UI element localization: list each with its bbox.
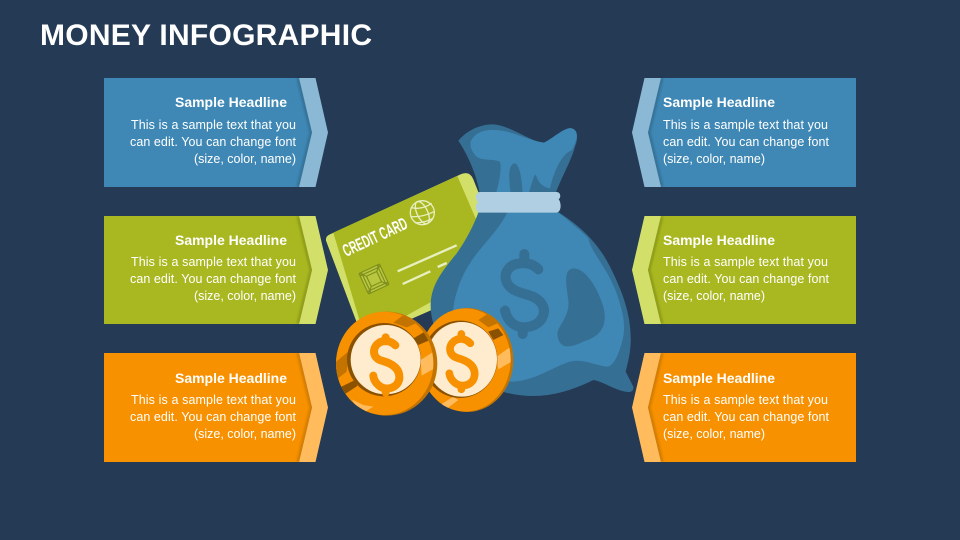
icon: dollar sign on right coin	[449, 334, 475, 389]
body text: top left: (size, color, name)	[194, 152, 296, 166]
chevron: top left	[299, 78, 328, 187]
headline: top right: Sample Headline	[663, 94, 775, 110]
body text: bottom right	[663, 393, 830, 441]
icon: globe	[410, 200, 434, 226]
chevron: bottom right	[632, 353, 661, 462]
body text: top left: This is a sample text that you	[131, 118, 296, 132]
body text: middle right: (size, color, name)	[663, 289, 765, 303]
body text: bottom right: can edit. You can change font	[663, 410, 830, 424]
body text: bottom left: (size, color, name)	[194, 427, 296, 441]
icon: chip	[359, 264, 389, 294]
body text: top right: (size, color, name)	[663, 152, 765, 166]
body text: middle left: This is a sample text that you	[131, 255, 296, 269]
icon: left coin	[333, 310, 437, 416]
body text: bottom left: This is a sample text that you	[131, 393, 296, 407]
chevron: bottom left	[299, 353, 328, 462]
body text: bottom right: This is a sample text that you	[663, 393, 828, 407]
panel: bottom right	[632, 353, 856, 462]
panel: middle left	[104, 216, 328, 324]
body text: bottom right: (size, color, name)	[663, 427, 765, 441]
headline: bottom right: Sample Headline	[663, 370, 775, 386]
body text: top right: can edit. You can change font	[663, 135, 830, 149]
card lines	[398, 245, 457, 284]
chevron: middle right	[632, 216, 661, 324]
icon: credit card	[326, 173, 493, 340]
card label: CREDIT CARD	[339, 213, 411, 261]
body text: middle left: can edit. You can change font	[130, 272, 297, 286]
icon: money bag	[431, 124, 633, 396]
headline: top left: Sample Headline	[175, 94, 287, 110]
body text: bottom left	[130, 393, 297, 441]
panel: bottom left	[104, 353, 328, 462]
body text: middle left	[130, 255, 297, 303]
body text: top left	[130, 118, 297, 166]
icon: right coin	[420, 308, 513, 412]
illustration: credit card, money bag and coins	[326, 124, 633, 416]
headline: middle left: Sample Headline	[175, 232, 287, 248]
body text: bottom left: can edit. You can change font	[130, 410, 297, 424]
headline: middle right: Sample Headline	[663, 232, 775, 248]
headline: bottom left: Sample Headline	[175, 370, 287, 386]
bag tie	[476, 192, 561, 213]
chevron: middle left	[299, 216, 328, 324]
body text: middle right: can edit. You can change font	[663, 272, 830, 286]
body text: middle right	[663, 255, 830, 303]
title: MONEY INFOGRAPHIC	[40, 19, 372, 52]
bag body	[431, 210, 633, 396]
body text: top right: This is a sample text that you	[663, 118, 828, 132]
chevron: top right	[632, 78, 661, 187]
bag neck	[458, 124, 577, 195]
panel: top left	[104, 78, 328, 187]
panel: middle right	[632, 216, 856, 324]
panel: top right	[632, 78, 856, 187]
body text: top left: can edit. You can change font	[130, 135, 297, 149]
icon: dollar sign on bag	[505, 254, 544, 334]
body text: middle right: This is a sample text that you	[663, 255, 828, 269]
body text: top right	[663, 118, 830, 166]
body text: middle left: (size, color, name)	[194, 289, 296, 303]
icon: dollar sign on left coin	[373, 337, 399, 393]
